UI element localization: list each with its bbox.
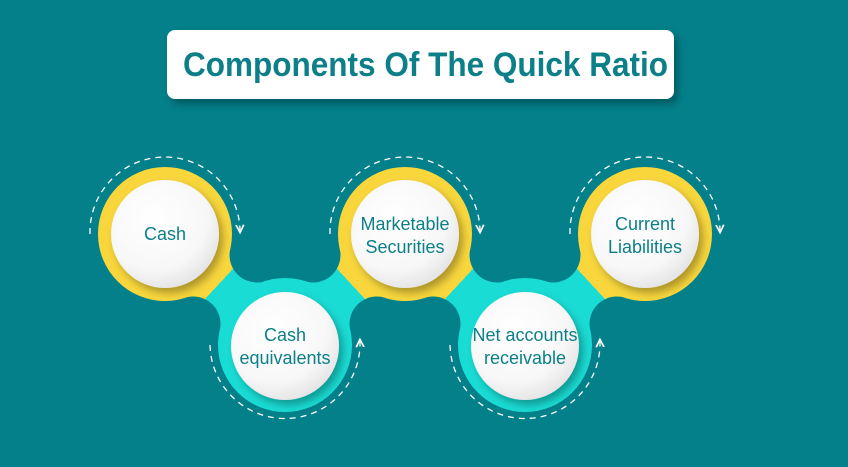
node: Net accounts receivable xyxy=(450,278,600,418)
node: Current Liabilities: Current xyxy=(615,214,675,234)
node: Net accounts receivable: receivable xyxy=(484,348,566,368)
title xyxy=(167,30,674,99)
node: Net accounts receivable: Net accounts xyxy=(472,325,578,345)
node: Cash: Cash xyxy=(144,224,186,244)
node: Current Liabilities xyxy=(570,157,720,301)
node: Marketable Securities: Securities xyxy=(365,237,445,257)
node: Current Liabilities: Liabilities xyxy=(608,237,682,257)
node: Cash equivalents xyxy=(210,278,360,419)
node: Cash equivalents: equivalents xyxy=(239,348,331,368)
node: Marketable Securities: Marketable xyxy=(360,214,450,234)
title: Components Of The Quick Ratio xyxy=(183,46,668,84)
node: Cash equivalents: Cash xyxy=(264,325,306,345)
connectors xyxy=(165,228,645,352)
node: Marketable Securities xyxy=(330,157,480,301)
node: Cash xyxy=(90,157,240,301)
